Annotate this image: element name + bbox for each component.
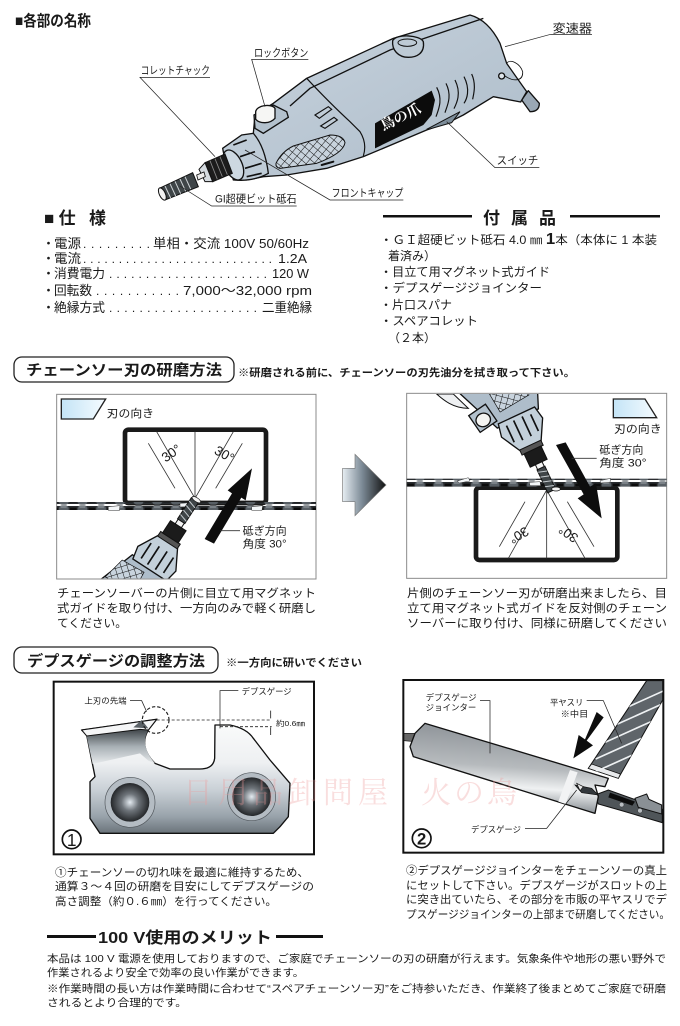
caption: depth gauge one: ①チェーンソーの切れ味を最適に維持するため、 (55, 865, 309, 879)
text block: specification list: .................... (109, 301, 257, 315)
label: grinding direction angle: 角度 30° (243, 538, 287, 551)
label: depth gauge (220, 687, 292, 728)
text block: merits description: 作業されるより安全で効率の良い作業ができます。 (47, 966, 304, 979)
label: grinding direction angle: 角度 30° (599, 456, 647, 469)
text block: merits description: されるとより合理的です。 (47, 996, 187, 1009)
chain (407, 478, 667, 487)
label: collet chuck (140, 65, 215, 157)
panel: depth gauge diagram one (54, 682, 314, 854)
caption: depth gauge two: プスゲージジョインターの上部まで研磨してください。 (406, 907, 670, 921)
icon: rotary tool body (227, 15, 539, 180)
icon: carbide bit (157, 173, 198, 201)
text block: merits description: 本品は 100 V 電源を使用しておりますので、ご家庭でチェーンソーの刃の研磨が行えます。気象条件や地形の悪い野外で (47, 952, 666, 965)
badge: number one (62, 830, 81, 850)
label: depth gauge jointer: デプスゲージ (426, 693, 477, 703)
text block: specification list: 7,000～32,000 rpm (183, 283, 312, 298)
text block: accessories list: ・デプスゲージジョインター (380, 280, 542, 295)
chain (57, 502, 316, 511)
text block: specification list: ・ (42, 283, 55, 298)
text block: specification list (42, 236, 312, 315)
label: lock button (252, 48, 308, 107)
heading: specifications: ■仕 様 (44, 209, 106, 228)
label: depth gauge: デプスゲージ (471, 824, 521, 834)
text block: specification list: 単相・交流 100V 50/60Hz (153, 236, 309, 251)
diagram: guide with 30 degree lines: 30° (556, 522, 581, 546)
label: front cap (245, 150, 404, 200)
title: parts names: ■各部の名称 (15, 11, 91, 30)
icon: collet chuck (197, 154, 232, 182)
label: switch: スイッチ (497, 155, 538, 167)
arrow: grinding direction (556, 442, 602, 518)
label: collet chuck: コレットチャック (141, 65, 210, 77)
caption: step one (57, 586, 316, 630)
text block: accessories list: ・スペアコレット (380, 314, 478, 328)
text block: specification list: ...................... (109, 267, 267, 281)
heading: merits of 100 V (47, 929, 323, 947)
icon: blade direction (61, 399, 154, 420)
icon: blade direction (613, 399, 662, 435)
text block: specification list: 回転数 (54, 283, 92, 298)
text block: merits description (47, 952, 667, 1009)
label: grinding direction angle (572, 444, 647, 469)
diagram: guide with 30 degree lines: 30° (212, 443, 237, 466)
tool illustration with part labels (140, 15, 592, 206)
text block: specification list: 電流 (54, 251, 81, 266)
label: grinding direction angle (220, 524, 287, 551)
text block: accessories list (380, 231, 657, 345)
label: upper cutter tip (84, 695, 147, 712)
text block: accessories list: ・目立て用マグネット式ガイド (380, 265, 550, 279)
text block: accessories list: 着済み） (388, 248, 436, 263)
chain pieces (404, 733, 662, 823)
label: flat file: ※中目 (561, 709, 588, 719)
label: grinding direction angle: 砥ぎ方向 (243, 524, 287, 537)
label: depth gauge (471, 790, 577, 834)
icon: depth gauge jointer (410, 723, 608, 813)
caption: step two: ソーバーに取り付け、同様に研磨してください (407, 616, 667, 630)
diagram: cutter link (82, 719, 290, 833)
diagram: guide with 30 degree lines: 30° (506, 524, 531, 547)
arrow: to next step (343, 454, 386, 516)
text block: specification list: ......... (83, 237, 150, 251)
label: 0.6 mm: 約0.6㎜ (276, 718, 305, 728)
watermark (183, 777, 520, 810)
caption: depth gauge one: 高さ調整（約０.６㎜）を行ってください。 (55, 894, 277, 908)
panel: sharpening step one (56, 394, 316, 580)
caption: depth gauge two: に突き出ていたら、その部分を市販の平ヤスリでデ (406, 892, 667, 906)
text block: specification list: 電源 (54, 236, 81, 251)
caption: step one: てください。 (57, 617, 127, 630)
badge: number one: 1 (67, 830, 76, 850)
label: GI carbide bit: GI超硬ビット砥石 (215, 193, 297, 206)
label: flat file: 平ヤスリ (550, 697, 583, 707)
text block: specification list: ・ (42, 266, 55, 281)
caption: step two (407, 586, 667, 630)
label: depth gauge jointer (426, 693, 490, 753)
label: speed controller: 変速器 (553, 21, 592, 36)
section heading: depth gauge adjustment: デプスゲージの調整方法 (27, 652, 205, 670)
caption: step two: 立て用マグネット式ガイドを反対側のチェーン (407, 601, 667, 615)
text block: specification list: ........................... (83, 252, 272, 266)
watermark: 日用品卸問屋 (183, 777, 393, 810)
panel: sharpening step two (406, 392, 668, 579)
text block: accessories list: （２本） (388, 331, 436, 345)
icon: flat file (587, 681, 670, 778)
panel: depth gauge diagram two (403, 680, 670, 853)
text block: specification list: ・ (42, 251, 55, 266)
diagram: guide with 30 degree lines: 30° (159, 441, 184, 465)
text block: specification list: ・ (42, 300, 55, 315)
label: depth gauge: デプスゲージ (242, 687, 292, 697)
note: wipe off oil: ※研磨される前に、チェーンソーの刃先油分を拭き取って下さい。 (238, 366, 575, 379)
label: switch (447, 122, 539, 168)
text block: specification list: 120 W (272, 266, 310, 281)
caption: depth gauge one (55, 865, 314, 908)
text block: specification list: ........... (96, 284, 179, 298)
text block: accessories list: ・ＧＩ超硬ビット砥石 4.0 ㎜ 1本（本体に 1 本装 (380, 231, 657, 248)
heading: accessories: 付属品 (483, 209, 556, 228)
caption: depth gauge one: 通算３～４回の研磨を目安にしてデプスゲージの (55, 879, 314, 893)
heading: merits of 100 V: 100 V使用のメリット (98, 929, 272, 947)
icon: front cap (219, 133, 268, 183)
text block: merits description: ※作業時間の長い方は作業時間に合わせて“スペアチェーンソー刃”をご持参いただき、作業終了後まとめてご家庭で研磨 (47, 982, 667, 995)
text block: specification list: 絶縁方式 (54, 300, 105, 315)
icon: tool tip (101, 496, 201, 578)
icon: tool tip (436, 394, 560, 494)
caption: step one: チェーンソーバーの片側に目立て用マグネット (57, 586, 316, 600)
caption: step one: 式ガイドを取り付け、一方向のみで軽く研磨し (57, 601, 316, 615)
note: sharpen in one direction: ※一方向に研いでください (226, 656, 362, 669)
caption: depth gauge two: ②デプスゲージジョインターをチェーンソーの真上 (406, 863, 667, 877)
text block: specification list: 二重絶縁 (262, 300, 312, 315)
label: grinding direction angle: 砥ぎ方向 (599, 444, 643, 457)
caption: depth gauge two (406, 863, 670, 921)
label: lock button: ロックボタン (254, 48, 308, 60)
icon: blade direction: 刃の向き (107, 406, 154, 420)
arrow: file direction (573, 712, 604, 758)
text block: specification list: 1.2A (278, 251, 307, 266)
label: flat file (550, 697, 622, 743)
section heading: chainsaw blade sharpening: チェーンソー刃の研磨方法 (26, 361, 222, 379)
watermark: 火の鳥 (421, 777, 520, 810)
section heading: depth gauge adjustment (14, 647, 218, 673)
caption: step two: 片側のチェーンソー刃が研磨出来ましたら、目 (407, 586, 667, 600)
label: GI carbide bit (180, 186, 297, 206)
annotation: dashed reference lines (142, 707, 272, 735)
icon: blade direction: 刃の向き (614, 421, 662, 435)
label: front cap: フロントキャップ (332, 188, 404, 200)
arrow: grinding direction (205, 468, 252, 544)
diagram: guide with 30 degree lines (125, 430, 266, 503)
caption: depth gauge two: にセットして下さい。デプスゲージがスロットの上 (406, 878, 667, 892)
badge: number two (412, 829, 431, 849)
label: depth gauge jointer: ジョインター (426, 703, 476, 713)
text block: accessories list: ・片口スパナ (380, 298, 452, 312)
label: upper cutter tip: 上刃の先端 (84, 695, 127, 705)
badge: number two: 2 (417, 830, 426, 849)
diagram: guide with 30 degree lines (476, 488, 617, 560)
label: speed controller (505, 21, 592, 47)
section heading: chainsaw blade sharpening (14, 357, 234, 382)
icon: rotary tool body: 鳥の爪 (378, 100, 424, 134)
text block: specification list: ・ (42, 236, 55, 251)
text block: specification list: 消費電力 (54, 266, 105, 281)
